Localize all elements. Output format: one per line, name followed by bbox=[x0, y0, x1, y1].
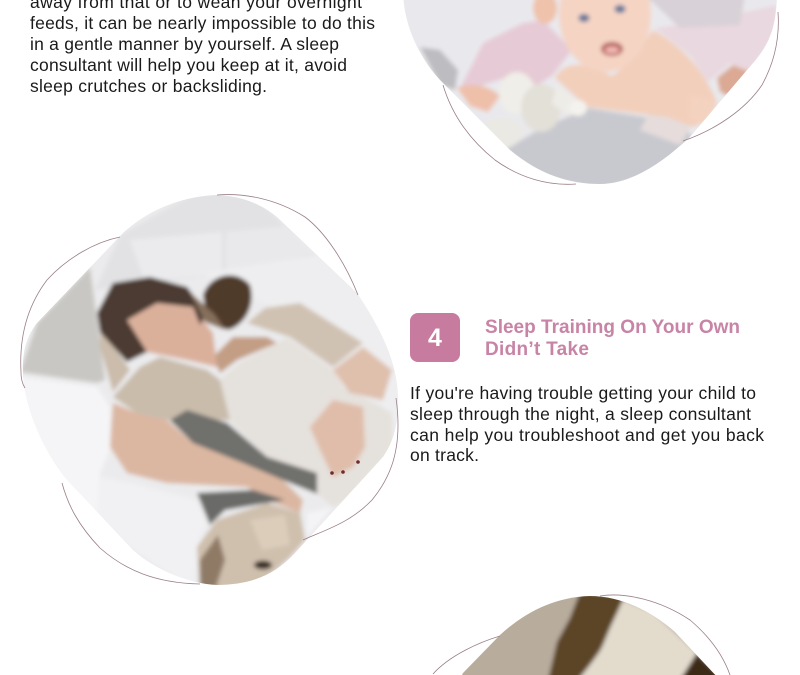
step 4 heading: Sleep Training On Your Own bbox=[485, 317, 740, 338]
text block: step 4 body: sleep through the night, a sleep consultant bbox=[410, 404, 751, 424]
number badge: 4 bbox=[428, 324, 442, 352]
step 4 heading bbox=[485, 317, 740, 360]
photo: next step image, cropped at bottom bbox=[433, 590, 730, 675]
text block: step 3 body continued: consultant will help you keep at it, avoid bbox=[30, 55, 347, 75]
photo: mother sleeping with baby and dog bbox=[15, 190, 405, 590]
photo: smiling baby with toy bbox=[400, 0, 785, 190]
outline: next photo contour bbox=[433, 636, 500, 674]
outline: mother photo contour bbox=[21, 237, 120, 388]
ring and nail detail bbox=[330, 460, 360, 475]
text block: step 3 body continued: sleep crutches or backsliding. bbox=[30, 76, 267, 96]
step 4 heading: Didn’t Take bbox=[485, 339, 589, 360]
text block: step 3 body continued: in a gentle manner by yourself. A sleep bbox=[30, 34, 339, 54]
text block: step 3 body continued: feeds, it can be nearly impossible to do this bbox=[30, 13, 375, 33]
outline: baby photo lower left bbox=[443, 85, 576, 184]
text block: step 3 body continued bbox=[30, 0, 375, 96]
text block: step 4 body bbox=[410, 383, 764, 465]
text block: step 4 body: on track. bbox=[410, 445, 479, 465]
step 4 header bbox=[410, 313, 740, 362]
text block: step 4 body: can help you troubleshoot and get you back bbox=[410, 425, 764, 445]
number badge bbox=[410, 313, 460, 362]
text block: step 4 body: If you're having trouble getting your child to bbox=[410, 383, 756, 403]
